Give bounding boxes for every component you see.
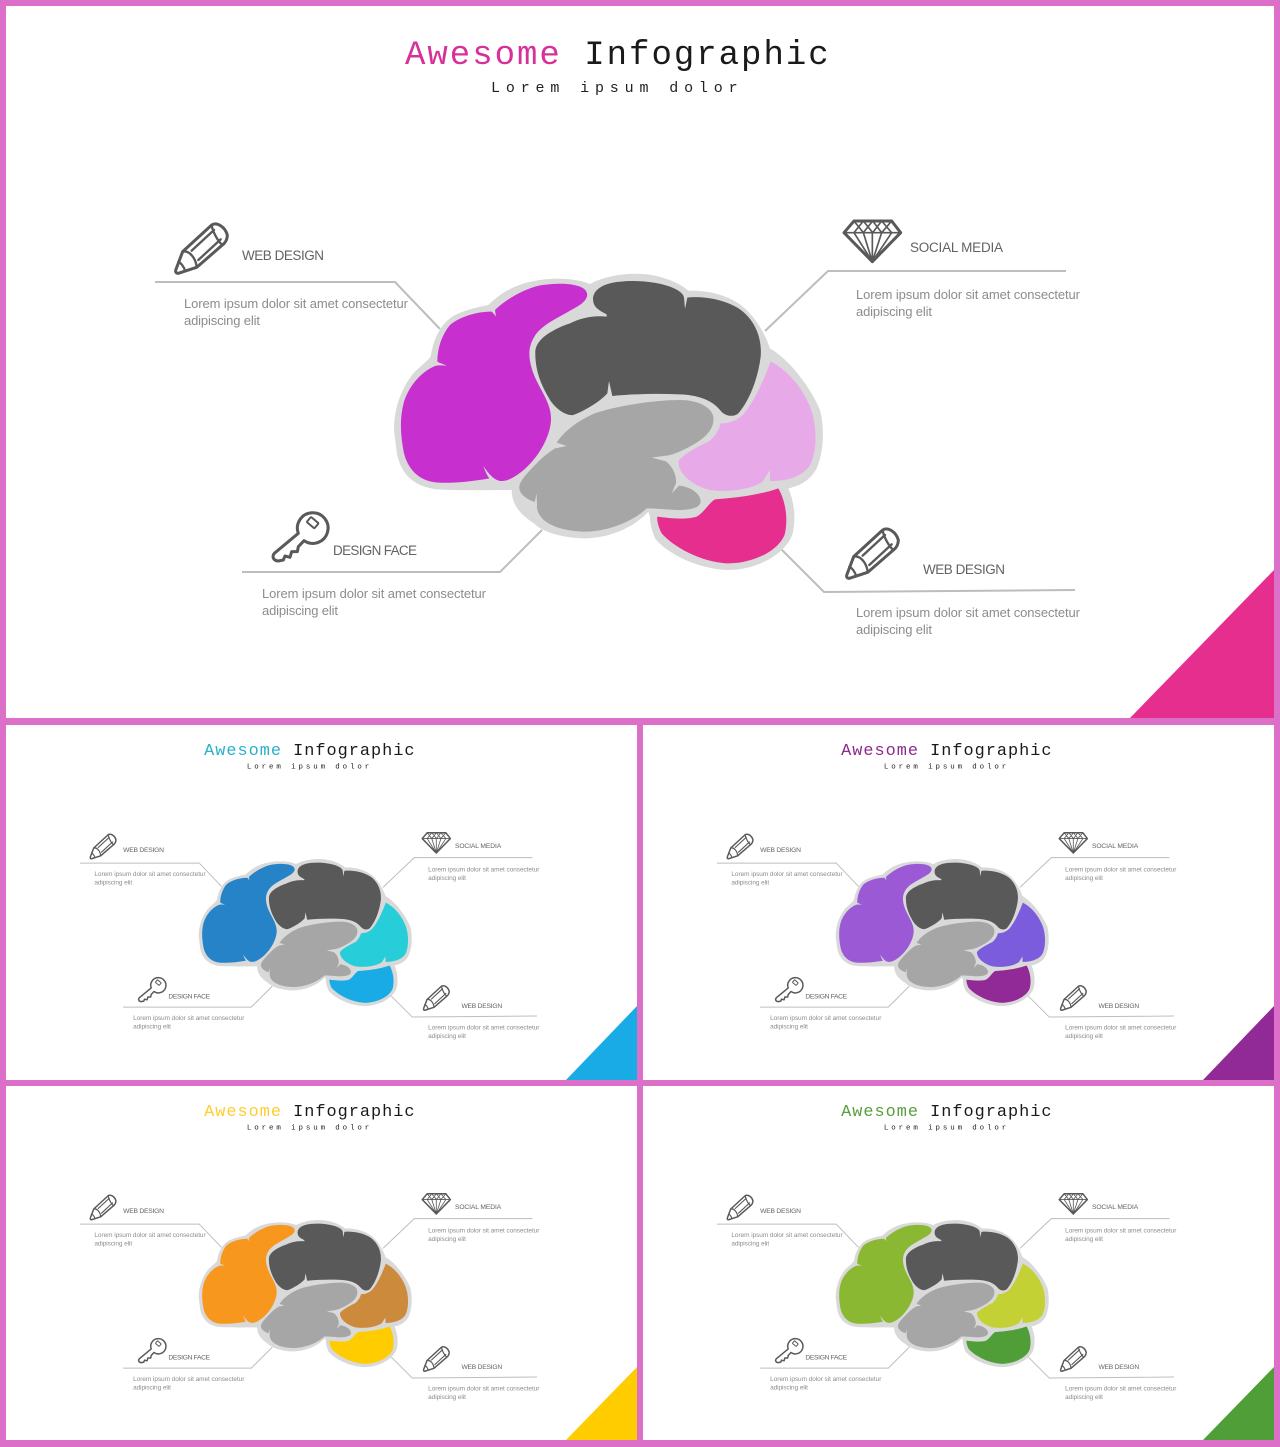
callout: web design top left: WEB DESIGN bbox=[123, 1208, 164, 1215]
brain diagram bbox=[199, 859, 412, 1006]
icon: key bbox=[139, 1339, 166, 1363]
icon: diamond bbox=[1059, 1194, 1087, 1214]
callout: social media: SOCIAL MEDIA bbox=[910, 240, 1003, 255]
subtitle: Lorem ipsum dolor bbox=[491, 80, 743, 97]
callout: web design bottom right: WEB DESIGN bbox=[923, 562, 1005, 577]
callout: web design bottom right: Lorem ipsum dolor sit amet consectetur bbox=[856, 605, 1081, 620]
slide content bbox=[80, 1103, 540, 1401]
callout: design face: DESIGN FACE bbox=[805, 1355, 848, 1362]
callout: social media: Lorem ipsum dolor sit amet consectetur bbox=[1065, 1228, 1177, 1235]
title: Awesome Infographic bbox=[405, 37, 831, 75]
callout: web design bottom right bbox=[847, 529, 1081, 637]
title: Awesome Infographic bbox=[204, 742, 415, 761]
callout: web design bottom right: adipiscing elit bbox=[428, 1394, 466, 1401]
callout: design face: Lorem ipsum dolor sit amet consectetur bbox=[262, 586, 487, 601]
callout: social media bbox=[422, 833, 540, 882]
callout: social media: Lorem ipsum dolor sit amet consectetur bbox=[428, 867, 540, 874]
panel background bbox=[643, 1086, 1274, 1440]
icon: key bbox=[776, 1339, 803, 1363]
callout: design face: Lorem ipsum dolor sit amet consectetur bbox=[133, 1015, 245, 1022]
icon: diamond bbox=[844, 221, 901, 262]
subtitle: Lorem ipsum dolor bbox=[247, 1125, 372, 1133]
callout: social media: SOCIAL MEDIA bbox=[455, 1204, 502, 1211]
callout: design face: DESIGN FACE bbox=[168, 1355, 211, 1362]
callout: web design top left: adipiscing elit bbox=[184, 313, 260, 328]
icon: key bbox=[139, 978, 166, 1002]
callout: social media bbox=[844, 221, 1081, 319]
callout: web design bottom right: WEB DESIGN bbox=[461, 1364, 502, 1371]
callout: design face: DESIGN FACE bbox=[805, 994, 848, 1001]
callout: web design bottom right: Lorem ipsum dolor sit amet consectetur bbox=[1065, 1024, 1177, 1031]
panel background bbox=[6, 1086, 637, 1440]
callout: web design bottom right bbox=[1061, 986, 1177, 1040]
title: Awesome Infographic bbox=[204, 1103, 415, 1122]
callout: design face: DESIGN FACE bbox=[168, 994, 211, 1001]
callout: design face: adipiscing elit bbox=[770, 1384, 808, 1391]
callout: web design top left: adipiscing elit bbox=[94, 879, 132, 886]
callout: web design bottom right: WEB DESIGN bbox=[1098, 1003, 1139, 1010]
callout: design face: adipiscing elit bbox=[262, 603, 338, 618]
callout: social media: SOCIAL MEDIA bbox=[455, 843, 502, 850]
panel: blue slide bbox=[6, 725, 637, 1080]
callout: web design bottom right: WEB DESIGN bbox=[1098, 1364, 1139, 1371]
callout: web design top left: Lorem ipsum dolor sit amet consectetur bbox=[94, 871, 206, 878]
callout: social media bbox=[422, 1194, 540, 1243]
corner triangle bbox=[1203, 1006, 1274, 1080]
icon: pencil bbox=[90, 834, 116, 859]
callout: social media: adipiscing elit bbox=[428, 1236, 466, 1243]
callout: web design top left: WEB DESIGN bbox=[242, 248, 324, 263]
callout: web design bottom right: adipiscing elit bbox=[428, 1033, 466, 1040]
icon: diamond bbox=[422, 1194, 450, 1214]
corner triangle bbox=[1130, 570, 1274, 718]
corner triangle bbox=[566, 1367, 637, 1440]
icon: key bbox=[776, 978, 803, 1002]
brain diagram bbox=[836, 859, 1049, 1006]
callout: web design bottom right: Lorem ipsum dolor sit amet consectetur bbox=[428, 1385, 540, 1392]
callout: social media: adipiscing elit bbox=[1065, 1236, 1103, 1243]
connector lines bbox=[155, 271, 1075, 592]
panel: green slide bbox=[643, 1086, 1274, 1440]
callout: social media: Lorem ipsum dolor sit amet consectetur bbox=[856, 287, 1081, 302]
callout: design face bbox=[133, 1339, 245, 1391]
icon: key bbox=[273, 513, 328, 561]
callout: design face: adipiscing elit bbox=[133, 1023, 171, 1030]
callout: design face bbox=[770, 978, 882, 1030]
corner triangle bbox=[1203, 1367, 1274, 1440]
callout: web design top left bbox=[90, 1195, 206, 1247]
connector lines bbox=[80, 858, 537, 1017]
callout: social media: SOCIAL MEDIA bbox=[1092, 843, 1139, 850]
callout: design face: adipiscing elit bbox=[133, 1384, 171, 1391]
callout: web design bottom right: Lorem ipsum dolor sit amet consectetur bbox=[428, 1024, 540, 1031]
callout: web design top left bbox=[90, 834, 206, 886]
icon: diamond bbox=[1059, 833, 1087, 853]
callout: web design bottom right: adipiscing elit bbox=[856, 622, 932, 637]
callout: design face bbox=[133, 978, 245, 1030]
icon: pencil bbox=[424, 986, 449, 1010]
callout: web design bottom right: adipiscing elit bbox=[1065, 1033, 1103, 1040]
callout: web design bottom right bbox=[424, 1347, 540, 1401]
callout: social media: SOCIAL MEDIA bbox=[1092, 1204, 1139, 1211]
callout: web design top left: Lorem ipsum dolor sit amet consectetur bbox=[94, 1232, 206, 1239]
callout: design face: adipiscing elit bbox=[770, 1023, 808, 1030]
brain diagram bbox=[199, 1220, 412, 1367]
callout: web design top left: adipiscing elit bbox=[731, 879, 769, 886]
icon: pencil bbox=[1061, 1347, 1086, 1371]
icon: pencil bbox=[727, 834, 753, 859]
panel: main pink slide bbox=[6, 6, 1274, 718]
subtitle: Lorem ipsum dolor bbox=[247, 764, 372, 772]
callout: web design top left: WEB DESIGN bbox=[760, 1208, 801, 1215]
slide content bbox=[717, 742, 1177, 1040]
connector lines bbox=[80, 1219, 537, 1378]
callout: design face: Lorem ipsum dolor sit amet consectetur bbox=[770, 1015, 882, 1022]
callout: social media: adipiscing elit bbox=[428, 875, 466, 882]
corner triangle bbox=[566, 1006, 637, 1080]
icon: pencil bbox=[424, 1347, 449, 1371]
callout: design face bbox=[262, 513, 487, 618]
panel background bbox=[643, 725, 1274, 1080]
callout: social media bbox=[1059, 1194, 1177, 1243]
callout: web design top left: WEB DESIGN bbox=[123, 847, 164, 854]
callout: social media: Lorem ipsum dolor sit amet consectetur bbox=[1065, 867, 1177, 874]
slide content bbox=[717, 1103, 1177, 1401]
callout: social media: adipiscing elit bbox=[1065, 875, 1103, 882]
panel background bbox=[6, 725, 637, 1080]
callout: design face: DESIGN FACE bbox=[333, 543, 417, 558]
callout: web design top left: adipiscing elit bbox=[731, 1240, 769, 1247]
panel background bbox=[6, 6, 1274, 718]
subtitle: Lorem ipsum dolor bbox=[884, 1125, 1009, 1133]
connector lines bbox=[717, 858, 1174, 1017]
callout: web design top left: Lorem ipsum dolor sit amet consectetur bbox=[731, 871, 843, 878]
brain diagram bbox=[836, 1220, 1049, 1367]
callout: web design bottom right bbox=[1061, 1347, 1177, 1401]
icon: diamond bbox=[422, 833, 450, 853]
callout: social media: adipiscing elit bbox=[856, 304, 932, 319]
callout: social media: Lorem ipsum dolor sit amet consectetur bbox=[428, 1228, 540, 1235]
brain diagram bbox=[394, 274, 823, 570]
callout: web design top left bbox=[176, 224, 409, 328]
callout: web design top left: Lorem ipsum dolor sit amet consectetur bbox=[184, 296, 409, 311]
icon: pencil bbox=[727, 1195, 753, 1220]
callout: web design top left: WEB DESIGN bbox=[760, 847, 801, 854]
callout: web design top left bbox=[727, 834, 843, 886]
callout: design face: Lorem ipsum dolor sit amet consectetur bbox=[770, 1376, 882, 1383]
connector lines bbox=[717, 1219, 1174, 1378]
title: Awesome Infographic bbox=[841, 1103, 1052, 1122]
title: Awesome Infographic bbox=[841, 742, 1052, 761]
callout: social media bbox=[1059, 833, 1177, 882]
icon: pencil bbox=[90, 1195, 116, 1220]
panel: purple slide bbox=[643, 725, 1274, 1080]
callout: web design bottom right: WEB DESIGN bbox=[461, 1003, 502, 1010]
subtitle: Lorem ipsum dolor bbox=[884, 764, 1009, 772]
panel: orange slide bbox=[6, 1086, 637, 1440]
callout: design face bbox=[770, 1339, 882, 1391]
callout: web design bottom right: adipiscing elit bbox=[1065, 1394, 1103, 1401]
icon: pencil bbox=[176, 224, 227, 273]
callout: web design top left: adipiscing elit bbox=[94, 1240, 132, 1247]
callout: design face: Lorem ipsum dolor sit amet consectetur bbox=[133, 1376, 245, 1383]
callout: web design top left bbox=[727, 1195, 843, 1247]
callout: web design top left: Lorem ipsum dolor sit amet consectetur bbox=[731, 1232, 843, 1239]
slide content bbox=[80, 742, 540, 1040]
icon: pencil bbox=[847, 529, 898, 578]
callout: web design bottom right: Lorem ipsum dolor sit amet consectetur bbox=[1065, 1385, 1177, 1392]
icon: pencil bbox=[1061, 986, 1086, 1010]
callout: web design bottom right bbox=[424, 986, 540, 1040]
